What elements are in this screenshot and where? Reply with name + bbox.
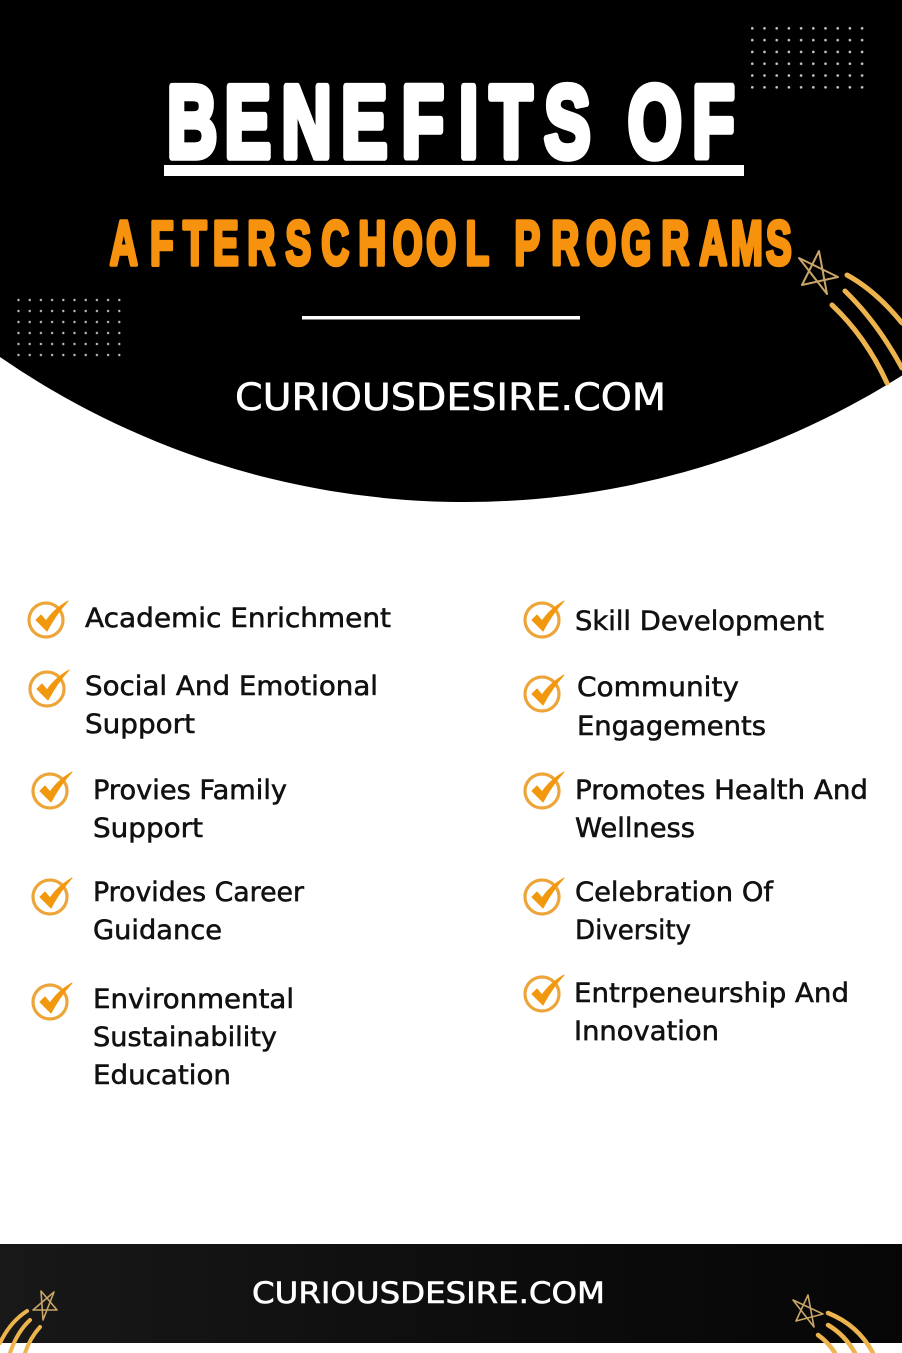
icon: shooting star footer right — [793, 1295, 873, 1353]
item: Environmental Sustainability Education: Education — [93, 1060, 231, 1091]
item: Promotes Health And Wellness — [525, 772, 868, 844]
header website url: CURIOUSDESIRE.COM — [235, 376, 666, 419]
item: Entrpeneurship And Innovation: Entrpeneurship And — [574, 978, 849, 1009]
header background — [0, 0, 902, 502]
item: Community Engagements: Community — [577, 672, 739, 703]
title underline — [164, 165, 744, 176]
item: Environmental Sustainability Education — [33, 983, 294, 1091]
item: Social And Emotional Support: Social And Emotional — [85, 671, 378, 702]
title: Benefits Of: BENEFITS OF — [167, 66, 735, 179]
item: Provies Family Support: Support — [93, 813, 203, 844]
item: Environmental Sustainability Education: Environmental — [93, 984, 294, 1015]
item: Social And Emotional Support — [30, 670, 378, 740]
list: right column — [525, 601, 868, 1047]
item: Promotes Health And Wellness: Wellness — [575, 813, 695, 844]
item: Community Engagements: Engagements — [577, 711, 766, 742]
dot grid: left — [17, 298, 122, 358]
item: Skill Development — [525, 601, 824, 637]
item: Entrpeneurship And Innovation: Innovation — [574, 1016, 719, 1047]
item: Provies Family Support — [33, 772, 287, 844]
item: Provides Career Guidance: Provides Career — [93, 877, 304, 908]
item: Celebration Of Diversity — [525, 877, 774, 946]
list: left column — [29, 601, 391, 1091]
item: Provides Career Guidance: Guidance — [93, 915, 222, 946]
header divider — [302, 316, 580, 320]
footer band — [0, 1244, 902, 1343]
item: Environmental Sustainability Education: Sustainability — [93, 1022, 277, 1053]
item: Community Engagements — [525, 672, 766, 742]
icon: shooting star footer left — [0, 1291, 57, 1353]
item: Provies Family Support: Provies Family — [93, 775, 287, 806]
item: Academic Enrichment: Academic Enrichment — [85, 603, 391, 634]
footer website url: CURIOUSDESIRE.COM — [252, 1276, 605, 1310]
item: Social And Emotional Support: Support — [85, 709, 195, 740]
dot grid: top right — [750, 27, 864, 89]
item: Academic Enrichment — [29, 601, 391, 637]
item: Celebration Of Diversity: Celebration Of — [575, 877, 774, 908]
item: Celebration Of Diversity: Diversity — [575, 915, 691, 946]
item: Skill Development: Skill Development — [575, 606, 824, 637]
item: Provides Career Guidance — [33, 877, 304, 946]
subtitle: Afterschool Programs: AFTERSCHOOL PROGRAMS — [110, 208, 792, 278]
icon: shooting star top right — [799, 251, 902, 383]
item: Promotes Health And Wellness: Promotes Health And — [575, 775, 868, 806]
item: Entrpeneurship And Innovation — [525, 975, 849, 1047]
